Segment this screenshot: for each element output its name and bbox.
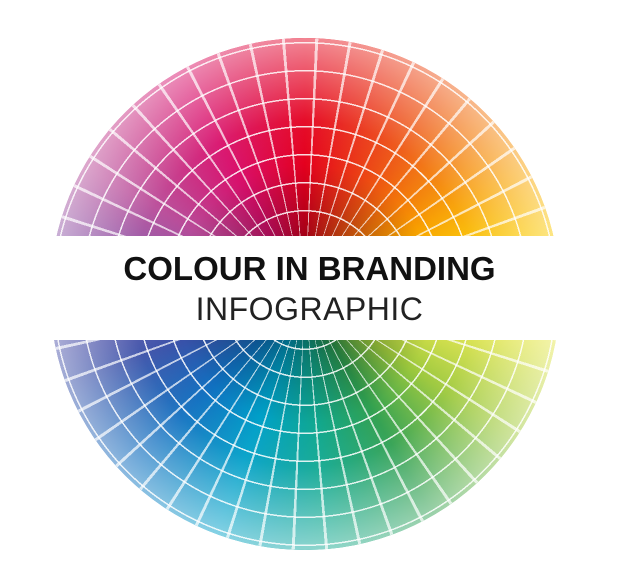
subtitle: INFOGRAPHIC [196,291,423,327]
white title band [0,236,619,340]
colour fan wheel [50,38,560,550]
title: COLOUR IN BRANDING [123,250,496,287]
